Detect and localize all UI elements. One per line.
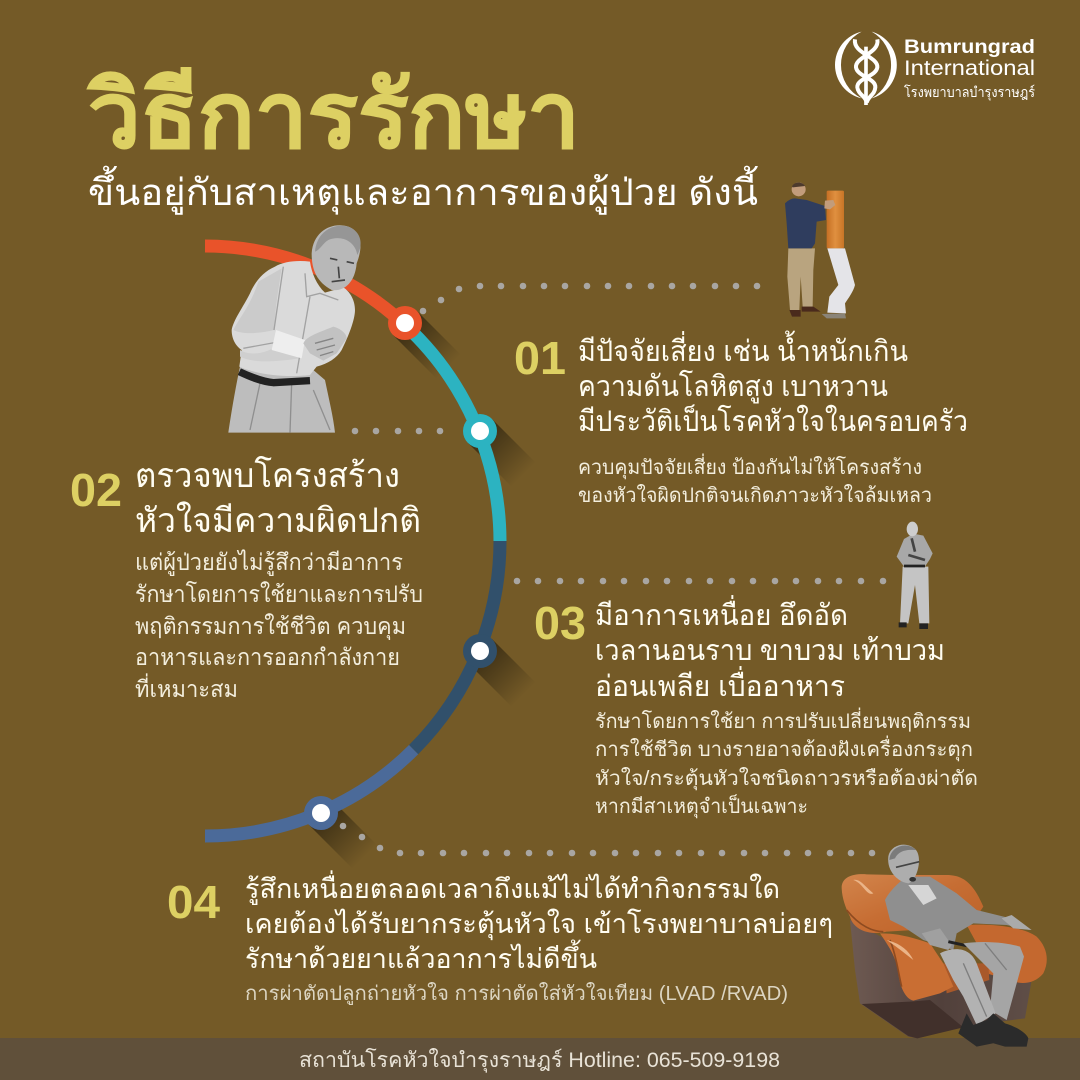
step 02 treatment text [135, 549, 423, 702]
step 03 treatment text: การใช้ชีวิต บางรายอาจต้องฝังเครื่องกระตุก [595, 735, 973, 762]
step 02 heading: ตรวจพบโครงสร้าง [135, 456, 400, 495]
step 02 heading [135, 456, 421, 540]
footer band [0, 1038, 1080, 1080]
step 01 heading: ความดันโลหิตสูง เบาหวาน [578, 369, 888, 404]
logo: Bumrungrad International [835, 32, 1035, 105]
node shadows [309, 311, 536, 869]
step 04 heading [245, 870, 833, 974]
photo: man clutching chest [228, 225, 361, 433]
step 02 heading: หัวใจมีความผิดปกติ [135, 501, 421, 540]
footer band: สถาบันโรคหัวใจบำรุงราษฎร์ Hotline: 065-509-9198 [299, 1048, 780, 1073]
step 03 heading: มีอาการเหนื่อย อึดอัด [595, 595, 848, 632]
step 03 heading: อ่อนเพลีย เบื่ออาหาร [595, 666, 845, 703]
dotted connector 1 [420, 283, 760, 314]
step 02 treatment text: แต่ผู้ป่วยยังไม่รู้สึกว่ามีอาการ [135, 549, 403, 576]
step 04 heading: รักษาด้วยยาแล้วอาการไม่ดีขึ้น [245, 939, 597, 974]
step 01 heading: มีปัจจัยเสี่ยง เช่น น้ำหนักเกิน [578, 330, 908, 368]
dotted connector 3 [514, 578, 886, 584]
node 03 navy [463, 634, 497, 668]
dotted connector 4 [340, 823, 875, 856]
node 01 orange [388, 306, 422, 340]
photo: standing elderly man [897, 522, 933, 629]
step 03 treatment text [595, 707, 978, 819]
step 01 treatment text: ควบคุมปัจจัยเสี่ยง ป้องกันไม่ให้โครงสร้าง [578, 453, 922, 480]
step 02 treatment text: ที่เหมาะสม [135, 673, 238, 702]
curved timeline arc [205, 246, 500, 836]
node 04 blue [304, 796, 338, 830]
step 03 number: 03 [534, 597, 586, 649]
step 01 treatment text: ของหัวใจผิดปกติจนเกิดภาวะหัวใจล้มเหลว [578, 484, 932, 507]
step 01 heading: มีประวัติเป็นโรคหัวใจในครอบครัว [578, 403, 968, 438]
step 02 treatment text: อาหารและการออกกำลังกาย [135, 644, 400, 670]
photo: man asleep in leather armchair [842, 845, 1047, 1047]
photo: man holding giant cigarette [785, 182, 855, 318]
step 04 heading: รู้สึกเหนื่อยตลอดเวลาถึงแม้ไม่ได้ทำกิจกรรมใด [245, 870, 780, 905]
step 03 heading [595, 595, 945, 703]
logo: Bumrungrad International: Bumrungrad [904, 37, 1035, 58]
step 01 treatment text [578, 453, 932, 507]
step 03 treatment text: หากมีสาเหตุจำเป็นเฉพาะ [595, 793, 808, 819]
step 01 heading [578, 330, 968, 438]
step 04 treatment text: การผ่าตัดปลูกถ่ายหัวใจ การผ่าตัดใส่หัวใจเทียม (LVAD /RVAD) [245, 982, 788, 1006]
step 03 heading: เวลานอนราบ ขาบวม เท้าบวม [595, 635, 945, 667]
subtitle: ขึ้นอยู่กับสาเหตุและอาการของผู้ป่วย ดังนี้ [88, 165, 759, 215]
step 04 heading: เคยต้องได้รับยากระตุ้นหัวใจ เข้าโรงพยาบาลบ่อยๆ [245, 908, 833, 941]
step 03 treatment text: รักษาโดยการใช้ยา การปรับเปลี่ยนพฤติกรรม [595, 707, 971, 733]
logo: Bumrungrad International: โรงพยาบาลบำรุงราษฎร์ [904, 84, 1035, 101]
node 02 teal [463, 414, 497, 448]
step 03 treatment text: หัวใจ/กระตุ้นหัวใจชนิดถาวรหรือต้องผ่าตัด [595, 767, 978, 791]
step 02 treatment text: พฤติกรรมการใช้ชีวิต ควบคุม [135, 613, 406, 640]
dotted connector 2 [352, 428, 443, 434]
step 02 number: 02 [70, 464, 122, 516]
step 04 number: 04 [167, 876, 220, 928]
step 02 treatment text: รักษาโดยการใช้ยาและการปรับ [135, 581, 423, 607]
logo: Bumrungrad International: International [904, 57, 1035, 80]
step 01 number: 01 [514, 332, 566, 384]
title: วิธีการรักษา [87, 65, 580, 167]
